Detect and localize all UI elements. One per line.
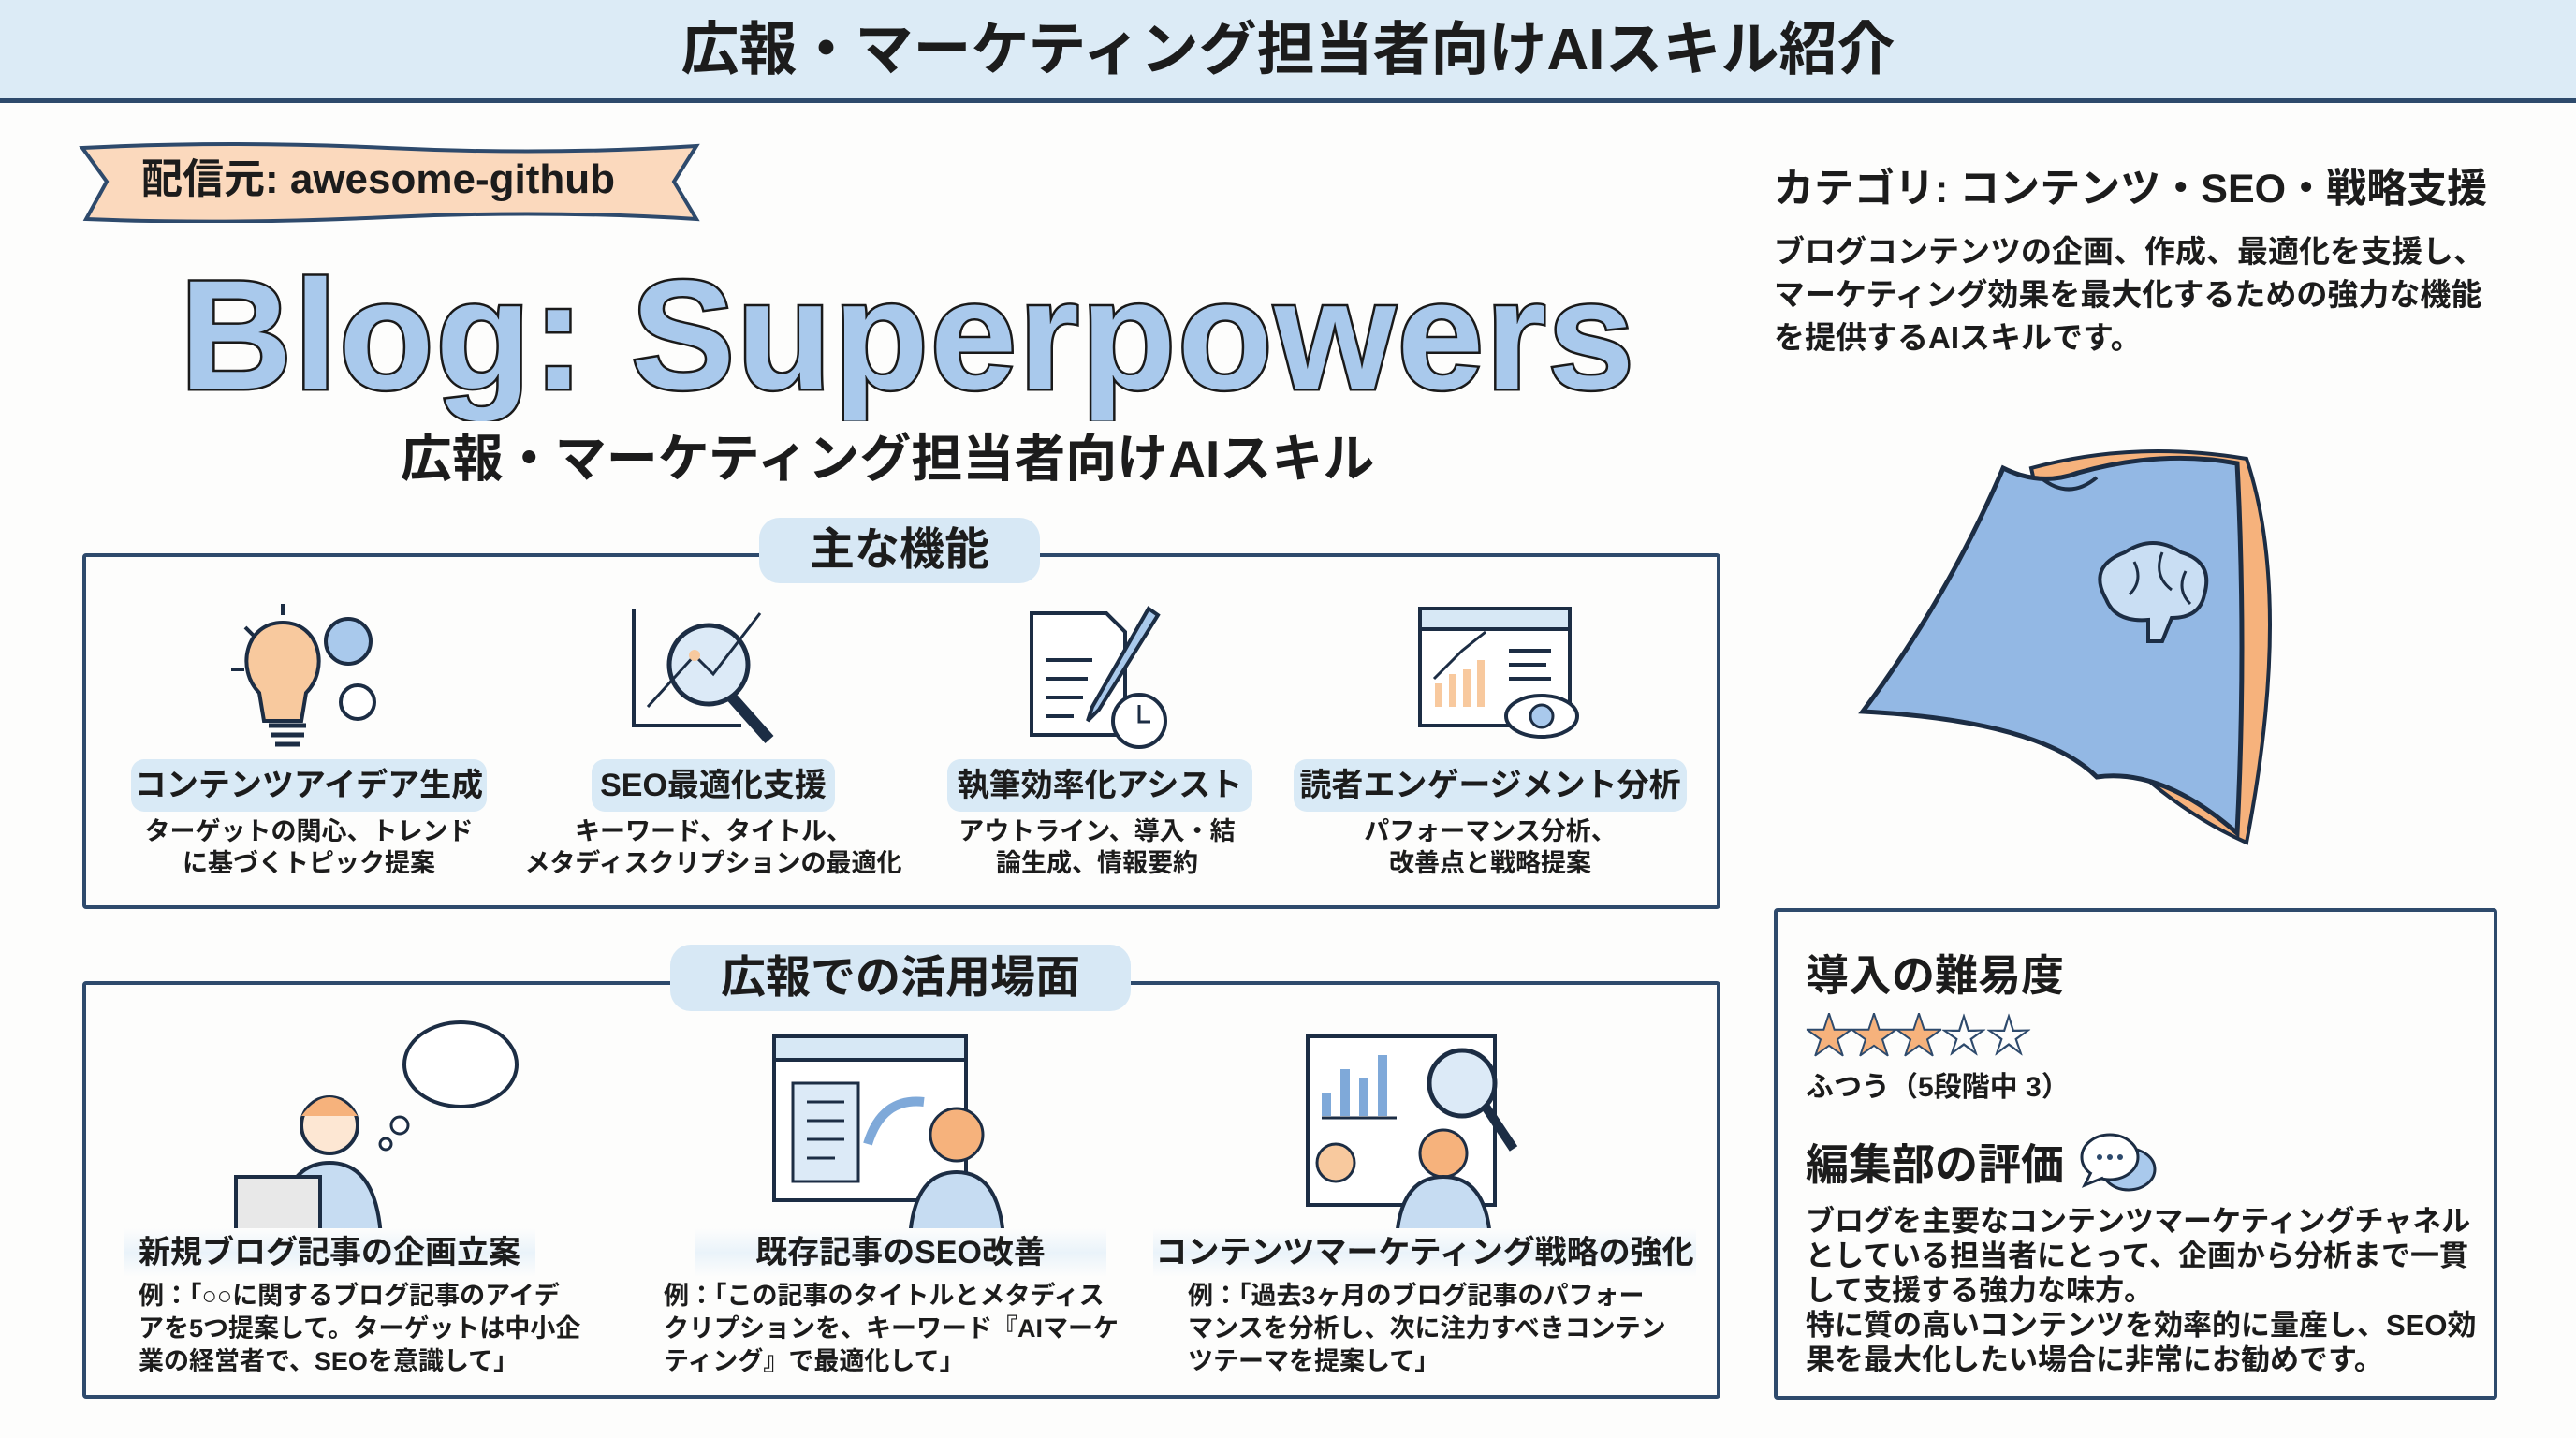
feature 1 description: に基づくトピック提案: [183, 849, 435, 877]
panel: difficulty and review: [1774, 908, 2497, 1400]
feature 3 description: アウトライン、導入・結: [959, 817, 1236, 845]
category description: [1774, 234, 2484, 355]
review heading with speech icon: [1806, 1133, 2157, 1191]
header title: 広報・マーケティング担当者向けAIスキル紹介: [681, 18, 1895, 82]
difficulty label: ふつう（5段階中 3）: [1806, 1072, 2070, 1103]
feature 1 icon: lightbulb: [231, 604, 376, 747]
feature 1 label: [131, 759, 487, 812]
review text: ブログを主要なコンテンツマーケティングチャネル: [1806, 1205, 2470, 1238]
icon: speech bubbles: [2080, 1133, 2157, 1191]
subtitle: 広報・マーケティング担当者向けAIスキル: [401, 430, 1374, 488]
scenario 2 example: クリプションを、キーワード『AIマーケ: [664, 1314, 1119, 1343]
scenario 1 illustration: person with laptop and thought cloud: [234, 1020, 519, 1228]
panel label: main features: 主な機能: [810, 525, 989, 575]
feature 2 label: SEO最適化支援: [600, 768, 827, 803]
panel label: main features: [759, 518, 1040, 583]
feature 3 icon: document pen clock: [1030, 606, 1167, 749]
feature 4 description: 改善点と戦略提案: [1389, 849, 1591, 877]
scenario 3 example: ツテーマを提案して」: [1188, 1347, 1440, 1375]
header band: [0, 0, 2576, 103]
category description: マーケティング効果を最大化するための強力な機能: [1774, 277, 2481, 312]
scenario 2 example: 例：「この記事のタイトルとメタディス: [664, 1282, 1105, 1310]
feature 3 description: [959, 817, 1236, 877]
review text: [1806, 1205, 2476, 1376]
scenario 1 example: アを5つ提案して。ターゲットは中小企: [139, 1314, 580, 1343]
feature 2 description: [524, 817, 902, 877]
ribbon: source: [79, 142, 700, 223]
review text: 果を最大化したい場合に非常にお勧めです。: [1806, 1343, 2383, 1376]
panel label: use cases: 広報での活用場面: [721, 953, 1080, 1003]
panel: main features: [82, 553, 1720, 909]
review text: 特に質の高いコンテンツを効率的に量産し、SEO効: [1806, 1309, 2476, 1342]
feature 2 description: キーワード、タイトル、: [575, 817, 852, 845]
scenario 3 example: マンスを分析し、次に注力すべきコンテン: [1188, 1314, 1666, 1343]
feature 4 description: パフォーマンス分析、: [1364, 817, 1617, 845]
category heading: カテゴリ: コンテンツ・SEO・戦略支援: [1774, 167, 2487, 212]
scenario 3 illustration: chart board and magnifier: [1306, 1034, 1518, 1228]
scenario 1 example: [139, 1282, 580, 1375]
feature 4 icon: browser chart eye: [1418, 607, 1579, 739]
review heading with speech icon: 編集部の評価: [1806, 1140, 2064, 1189]
panel label: use cases: [670, 945, 1131, 1011]
review text: としている担当者にとって、企画から分析まで一貫: [1806, 1240, 2468, 1272]
stars rating: ★★★☆☆: [1806, 1010, 2030, 1063]
feature 2 label: [592, 759, 835, 812]
scenario 2 example: ティング』で最適化して」: [664, 1347, 965, 1375]
feature 3 label: [947, 759, 1252, 812]
scenario 2 example: [664, 1282, 1119, 1375]
review text: して支援する強力な味方。: [1806, 1274, 2153, 1307]
feature 2 description: メタディスクリプションの最適化: [524, 849, 902, 877]
panel: use cases: [82, 981, 1720, 1399]
scenario 2 title: 既存記事のSEO改善: [755, 1235, 1046, 1270]
scenario 2 title: [695, 1228, 1106, 1277]
category description: を提供するAIスキルです。: [1774, 320, 2142, 355]
difficulty heading: 導入の難易度: [1806, 951, 2064, 1000]
icon: superhero cape with brain: [1858, 449, 2272, 845]
feature 4 description: [1364, 817, 1617, 877]
scenario 3 example: [1188, 1282, 1666, 1375]
scenario 1 example: 例：「○○に関するブログ記事のアイデ: [139, 1282, 560, 1310]
feature 2 icon: magnifier chart: [632, 609, 773, 743]
feature 3 description: 論生成、情報要約: [996, 849, 1198, 877]
scenario 2 illustration: browser with arrow and person: [772, 1034, 1004, 1228]
scenario 1 title: [124, 1228, 535, 1277]
feature 4 label: 読者エンゲージメント分析: [1299, 768, 1681, 803]
scenario 3 example: 例：「過去3ヶ月のブログ記事のパフォー: [1188, 1282, 1645, 1310]
category description: ブログコンテンツの企画、作成、最適化を支援し、: [1774, 234, 2484, 269]
scenario 1 example: 業の経営者で、SEOを意識して」: [139, 1347, 519, 1375]
feature 3 label: 執筆効率化アシスト: [958, 768, 1242, 803]
feature 1 description: ターゲットの関心、トレンド: [144, 817, 474, 845]
feature 4 label: [1294, 759, 1687, 812]
feature 1 label: コンテンツアイデア生成: [135, 768, 483, 803]
feature 1 description: [144, 817, 474, 877]
scenario 3 title: コンテンツマーケティング戦略の強化: [1155, 1235, 1694, 1270]
scenario 1 title: 新規ブログ記事の企画立案: [139, 1235, 520, 1270]
ribbon text: 配信元: awesome-github: [141, 156, 615, 202]
main title: Blog: Superpowers: [180, 249, 1636, 421]
